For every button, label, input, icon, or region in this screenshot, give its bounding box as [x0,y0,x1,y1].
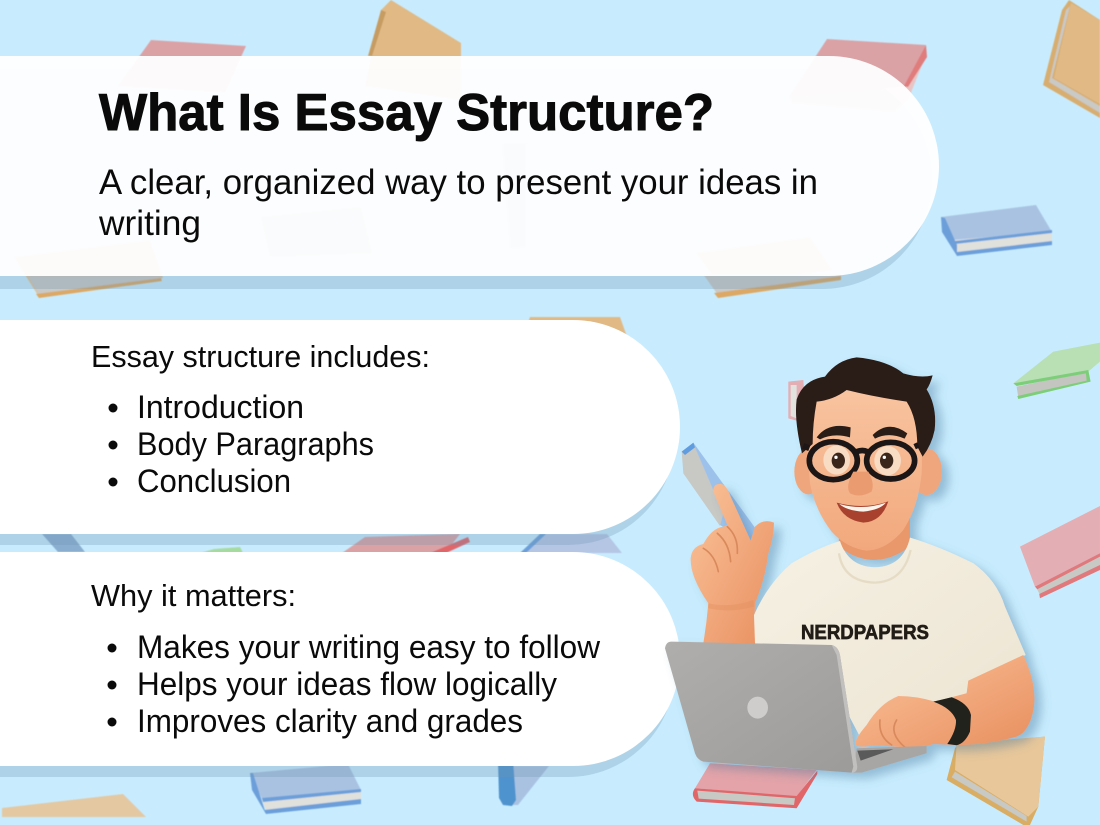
bullet list: Body Paragraphs [137,426,374,462]
panel: headline [0,56,939,276]
book: red gap [342,534,470,553]
subtitle [98,163,818,243]
hair [796,357,935,457]
t-shirt [754,538,1026,737]
shirt logo text: NERDPAPERS [801,622,929,644]
book: faded vertical [502,143,526,249]
book: red top left [118,40,246,92]
eyebrows [817,426,907,439]
book: tan under headline panel [696,237,841,298]
book: tan lower right [947,737,1045,825]
book: blue gap left [42,534,85,552]
panel: list shadow [0,331,675,545]
book: tan top right [1043,0,1100,118]
book: faded center [261,207,372,257]
bullet list [108,389,374,499]
why bullet list: Makes your writing easy to follow [137,629,601,665]
book: tan bottom left [2,794,146,817]
raised arm and hand [691,484,774,644]
laptop [665,642,927,773]
bullet list: Conclusion [137,463,291,499]
watch [933,697,971,745]
laptop logo [747,697,768,719]
panel: headline shadow [0,69,932,289]
book: green gap [200,547,243,553]
title: What Is Essay Structure? [99,84,714,142]
book: green [1013,343,1100,399]
panel: why shadow [0,563,675,777]
glasses [803,442,918,480]
subtitle: writing [98,204,201,243]
book: red top right [789,39,927,112]
book: tan top center [365,0,461,100]
book: blue below panel [250,764,361,814]
book: tan lower left [14,240,163,298]
book: tan behind list panel [520,317,630,345]
why bullet list: Helps your ideas flow logically [137,666,557,702]
right arm [855,655,1034,748]
book: red under laptop [693,763,817,808]
typing fingers [880,720,905,747]
book: blue near finger [682,443,757,543]
ears [794,448,942,495]
panel: why it matters [0,552,680,766]
subtitle: A clear, organized way to present your ideas in [99,163,818,202]
list heading: Essay structure includes: [91,339,430,374]
why bullet list: Improves clarity and grades [137,703,523,739]
eyes [823,445,901,475]
bullet list: Introduction [137,389,304,425]
face [806,390,922,551]
panel: essay structure includes [0,320,680,534]
book: blue right [941,205,1052,256]
book: blue vertical below panel [498,760,549,806]
collar [839,550,911,583]
book: pink behind head [788,380,807,423]
why heading: Why it matters: [91,578,296,613]
books around the character [665,343,1100,825]
why bullet list [108,629,601,739]
neck [838,513,910,560]
nose [848,472,873,495]
book: pink right [1020,506,1100,598]
book: blue gap right [520,534,622,553]
character [665,357,1034,773]
mouth [837,501,888,523]
